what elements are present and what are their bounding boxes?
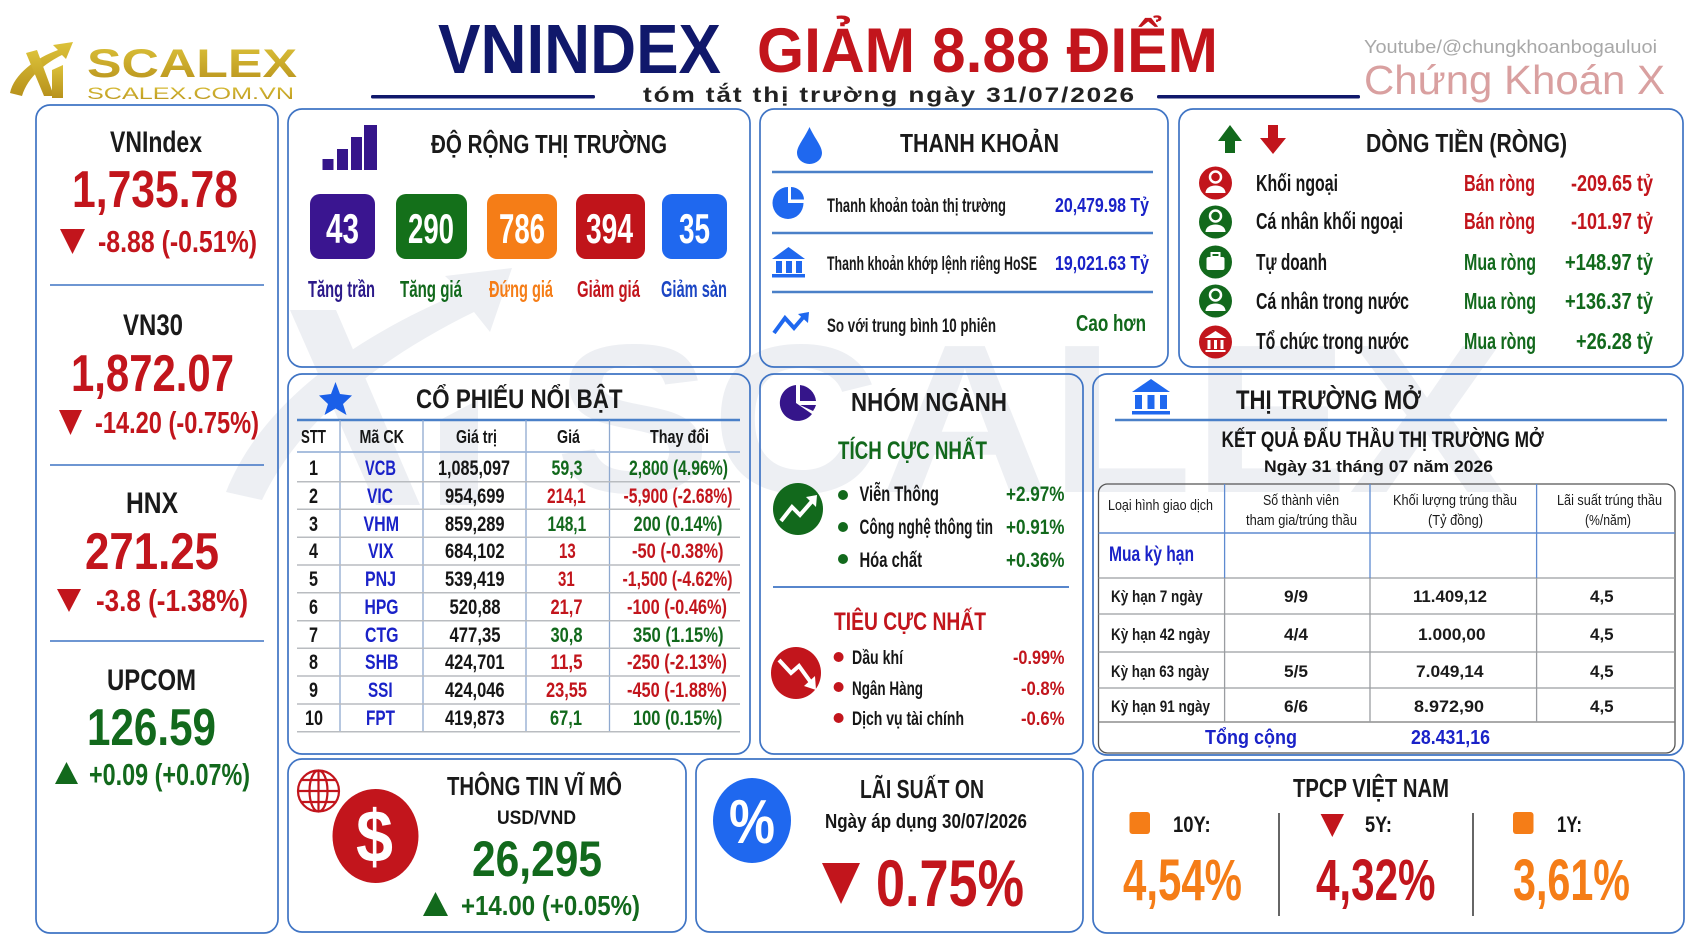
row: foreign [1199, 166, 1653, 200]
row VCB: VCB [365, 457, 396, 480]
bond 10Y: 10Y: [1173, 812, 1211, 837]
stat: up: 290 [408, 205, 454, 252]
panel: liquidity [760, 109, 1168, 367]
title: VNINDEX [438, 10, 721, 88]
list: positive sectors: +0.36% [1006, 549, 1065, 572]
stat: down: 394 [586, 205, 633, 252]
bond 1Y: 1Y: [1557, 812, 1582, 837]
icon: percent: % [729, 788, 775, 857]
VNIndex block: 1,735.78 [72, 161, 238, 219]
row: whole market: 20,479.98 Tỷ [1055, 195, 1150, 217]
list: positive sectors: +0.91% [1006, 516, 1065, 539]
stat: unchanged: 786 [499, 205, 545, 252]
UPCOM block: +0.09 (+0.07%) [89, 757, 250, 792]
row total: Tổng cộng [1205, 727, 1297, 749]
row: domestic individual: Mua ròng [1464, 288, 1536, 314]
row SSI: 424,046 [445, 679, 505, 702]
row FPT [305, 707, 722, 730]
row: HoSE matched: 19,021.63 Tỷ [1055, 253, 1150, 275]
row 63 days: 7.049,14 [1416, 662, 1484, 681]
row VHM [309, 513, 722, 536]
row: whole market [772, 187, 1150, 219]
stat: up: Tăng giá [400, 276, 462, 302]
row: compared with 10 sessions: Cao hơn [1076, 310, 1146, 336]
table header [1108, 493, 1662, 529]
panel: market indices [36, 105, 278, 933]
title: GIẢM 8.88 ĐIỂM [757, 15, 1218, 86]
row 7 days: Kỳ hạn 7 ngày [1111, 587, 1203, 606]
logo: Scalex [10, 42, 297, 103]
row: proprietary: Tự doanh [1256, 249, 1327, 275]
row total [1205, 727, 1490, 749]
row VCB: 2,800 (4.96%) [629, 457, 728, 480]
row PNJ: 5 [309, 568, 318, 591]
HNX block: HNX [126, 487, 178, 520]
row SSI [309, 679, 727, 702]
panel: macro info [288, 759, 686, 932]
VN30 block: -14.20 (-0.75%) [95, 405, 259, 440]
heading: open market: THỊ TRƯỜNG MỞ [1236, 383, 1421, 415]
row 63 days: 5/5 [1284, 662, 1308, 681]
heading: bonds: TPCP VIỆT NAM [1293, 773, 1449, 803]
list: negative sectors: Dịch vụ tài chính [852, 709, 964, 730]
table header: tham gia/trúng thầu [1246, 513, 1357, 529]
row 42 days [1111, 625, 1614, 644]
channel credit: Chứng Khoán X [1364, 57, 1665, 103]
row VHM: 200 (0.14%) [634, 513, 722, 536]
row 91 days: 6/6 [1284, 697, 1308, 716]
table header: Lãi suất trúng thầu [1557, 493, 1662, 509]
panel: notable stocks [288, 374, 750, 754]
row VHM: 148,1 [548, 513, 586, 536]
row VHM: 859,289 [445, 513, 505, 536]
stat: up [396, 194, 467, 302]
table header: Mã CK [360, 427, 404, 447]
row VIX: VIX [368, 540, 394, 563]
row HPG [309, 596, 727, 619]
row 7 days: 9/9 [1284, 587, 1308, 606]
panel: net money flow [1179, 109, 1683, 367]
table header: (%/năm) [1585, 513, 1631, 529]
row VIC: -5,900 (-2.68%) [624, 485, 732, 508]
row: compared with 10 sessions: So với trung bình 10 phiên [827, 316, 996, 337]
list: negative sectors: Ngân Hàng [852, 679, 923, 700]
row: domestic institution: +26.28 tỷ [1576, 328, 1653, 354]
row VIC: 2 [309, 485, 318, 508]
icon: dollar: $ [356, 795, 393, 878]
row SSI: 9 [309, 679, 318, 702]
stat: ceiling [308, 194, 375, 302]
label: currency pair: USD/VND [497, 808, 576, 829]
row VIX: 684,102 [445, 540, 505, 563]
change: exchange rate: +14.00 (+0.05%) [461, 890, 640, 921]
row 63 days: 4,5 [1590, 662, 1614, 681]
row VIX: 13 [559, 540, 576, 563]
VN30 block: 1,872.07 [71, 345, 234, 403]
row HPG: 520,88 [450, 596, 501, 619]
row: HoSE matched: Thanh khoản khớp lệnh riêng HoSE [827, 254, 1037, 275]
heading: macro: THÔNG TIN VĨ MÔ [447, 771, 622, 801]
row: foreign: Khối ngoại [1256, 170, 1338, 196]
channel credit [1364, 37, 1665, 103]
row 7 days: 11.409,12 [1413, 587, 1487, 606]
VNIndex block: -8.88 (-0.51%) [98, 224, 257, 259]
row SHB: -250 (-2.13%) [627, 651, 727, 674]
subheading: auction result: Ngày 31 tháng 07 năm 2026 [1264, 457, 1493, 476]
panel: government bonds [1093, 760, 1684, 933]
title [438, 10, 1218, 88]
panel: market breadth [288, 109, 750, 367]
icon: bank [1132, 379, 1170, 414]
row: whole market: Thanh khoản toàn thị trường [827, 196, 1006, 217]
row 42 days: 1.000,00 [1418, 625, 1486, 644]
icon: down arrow [1260, 125, 1286, 154]
icon: trending down [771, 647, 821, 699]
list: positive sectors: Hóa chất [860, 549, 922, 572]
icon: up arrow [1218, 125, 1242, 153]
heading: ON rate: LÃI SUẤT ON [860, 774, 984, 804]
value: exchange rate: 26,295 [472, 831, 602, 887]
UPCOM block: UPCOM [107, 664, 196, 697]
HNX block: 271.25 [85, 523, 219, 581]
icon: globe [298, 770, 339, 812]
row 42 days: 4/4 [1284, 625, 1309, 644]
row FPT: FPT [366, 707, 395, 730]
panel: open market [1093, 374, 1683, 755]
bond 1Y: 3,61% [1513, 848, 1630, 913]
row HPG: 6 [309, 596, 318, 619]
VN30 block [59, 309, 259, 440]
row SHB: SHB [365, 651, 398, 674]
row SHB: 11,5 [550, 651, 583, 674]
row FPT: 419,873 [445, 707, 505, 730]
heading: most negative: TIÊU CỰC NHẤT [834, 606, 986, 636]
row: foreign: Bán ròng [1464, 170, 1535, 196]
row VIC: 214,1 [547, 485, 586, 508]
logo: Scalex: SCALEX.COM.VN [87, 84, 294, 103]
row VCB: 1 [309, 457, 318, 480]
text: effective date: Ngày áp dụng 30/07/2026 [825, 811, 1027, 833]
row FPT: 100 (0.15%) [633, 707, 722, 730]
logo: Scalex: SCALEX [87, 42, 297, 86]
table: stocks [297, 420, 740, 732]
table header: Thay đổi [650, 427, 709, 447]
row FPT: 67,1 [550, 707, 582, 730]
row SHB: 8 [309, 651, 318, 674]
subtitle: tóm tắt thị trường ngày 31/07/2026 [643, 83, 1136, 107]
row: proprietary [1199, 246, 1653, 278]
list: negative sectors: -0.6% [1021, 709, 1065, 730]
row: foreign individual: Bán ròng [1464, 208, 1535, 234]
row: HoSE matched [772, 247, 1150, 278]
stat: floor: 35 [679, 205, 710, 252]
table header: (Tỷ đồng) [1428, 513, 1483, 529]
row VIC: VIC [367, 485, 393, 508]
list: negative sectors [834, 648, 1065, 730]
row: domestic institution: Tổ chức trong nước [1256, 328, 1409, 354]
list: positive sectors: Viễn Thông [860, 482, 939, 506]
row PNJ: PNJ [365, 568, 396, 591]
subheading: auction result: KẾT QUẢ ĐẤU THẦU THỊ TRƯỜNG MỞ [1222, 427, 1544, 452]
list: negative sectors: -0.99% [1013, 648, 1065, 669]
row CTG: 350 (1.15%) [633, 624, 724, 647]
row: proprietary: +148.97 tỷ [1565, 249, 1653, 275]
background watermark [226, 268, 1505, 537]
value: ON rate: 0.75% [876, 846, 1024, 920]
list: positive sectors [838, 482, 1065, 572]
heading: sectors: NHÓM NGÀNH [851, 387, 1007, 417]
row total: 28.431,16 [1411, 727, 1490, 749]
value: ON rate [822, 846, 1024, 920]
background watermark: SCALEX [555, 300, 1505, 537]
subheading: auction result [1222, 427, 1544, 476]
icon: star [319, 382, 352, 415]
row 42 days: Kỳ hạn 42 ngày [1111, 625, 1210, 644]
UPCOM block: 126.59 [87, 699, 216, 757]
list: positive sectors: Công nghệ thông tin [860, 516, 993, 539]
icon: pie chart [780, 385, 816, 421]
row FPT: 10 [305, 707, 323, 730]
row: domestic institution: Mua ròng [1464, 328, 1536, 354]
row SHB [309, 651, 727, 674]
row HPG: HPG [364, 596, 398, 619]
row 91 days [1111, 697, 1614, 716]
table header [301, 427, 709, 447]
bond 10Y [1123, 812, 1242, 913]
table header: STT [301, 427, 326, 447]
HNX block [57, 487, 248, 618]
row 7 days: 4,5 [1590, 587, 1614, 606]
stat: ceiling: 43 [326, 205, 359, 252]
row 42 days: 4,5 [1590, 625, 1614, 644]
subtitle [371, 83, 1360, 107]
row PNJ: 31 [558, 568, 575, 591]
row 63 days [1111, 662, 1614, 681]
list: positive sectors: +2.97% [1006, 483, 1065, 506]
row CTG: 477,35 [450, 624, 501, 647]
row VIX: 4 [309, 540, 318, 563]
row CTG [309, 624, 724, 647]
row SSI: -450 (-1.88%) [627, 679, 727, 702]
HNX block: -3.8 (-1.38%) [96, 583, 248, 618]
VN30 block: VN30 [123, 309, 183, 342]
panel: sectors [760, 374, 1083, 754]
row VIX [309, 540, 724, 563]
row: compared with 10 sessions [774, 310, 1146, 337]
table: auction [1098, 484, 1675, 753]
heading: breadth: ĐỘ RỘNG THỊ TRƯỜNG [431, 129, 667, 159]
row SSI: 23,55 [546, 679, 587, 702]
heading: stocks: CỔ PHIẾU NỔI BẬT [416, 383, 623, 414]
list: negative sectors: Dầu khí [852, 648, 904, 669]
row CTG: CTG [365, 624, 398, 647]
icon: signal bars [322, 125, 377, 170]
stat: down: Giảm giá [577, 276, 640, 302]
row VCB [309, 457, 728, 480]
row: foreign individual [1199, 206, 1653, 238]
heading: money flow: DÒNG TIỀN (RÒNG) [1366, 128, 1567, 158]
bond 10Y: 4,54% [1123, 848, 1242, 913]
row label: term purchase: Mua kỳ hạn [1109, 543, 1194, 566]
row VIC: 954,699 [445, 485, 505, 508]
stat: ceiling: Tăng trần [308, 276, 375, 302]
bond 5Y: 4,32% [1316, 848, 1436, 913]
row: foreign individual: Cá nhân khối ngoại [1256, 208, 1403, 234]
row HPG: -100 (-0.46%) [627, 596, 727, 619]
icon: dollar [332, 789, 418, 883]
table header: Loại hình giao dịch [1108, 498, 1213, 514]
row SHB: 424,701 [445, 651, 505, 674]
table header: Giá trị [456, 427, 497, 447]
row HPG: 21,7 [550, 596, 582, 619]
table header: Khối lượng trúng thầu [1393, 493, 1517, 509]
stat: unchanged [487, 194, 557, 302]
icon: water drop [797, 127, 822, 164]
row VHM: 3 [309, 513, 318, 536]
icon: trending up [773, 483, 823, 535]
row: domestic individual: Cá nhân trong nước [1256, 288, 1409, 314]
row VHM: VHM [364, 513, 399, 536]
panel: overnight rate [696, 759, 1083, 932]
row: domestic individual [1199, 284, 1653, 318]
row 7 days [1111, 587, 1614, 606]
row 63 days: Kỳ hạn 63 ngày [1111, 662, 1209, 681]
row VCB: 1,085,097 [438, 457, 510, 480]
row SSI: SSI [368, 679, 393, 702]
VNIndex block: VNIndex [110, 126, 202, 159]
bond 5Y [1316, 812, 1436, 913]
row 91 days: Kỳ hạn 91 ngày [1111, 697, 1210, 716]
row: proprietary: Mua ròng [1464, 249, 1536, 275]
row 91 days: 8.972,90 [1414, 697, 1484, 716]
row VCB: 59,3 [552, 457, 582, 480]
row: foreign individual: -101.97 tỷ [1571, 208, 1653, 234]
table header: Số thành viên [1263, 493, 1339, 509]
UPCOM block [55, 664, 250, 792]
heading: most positive: TÍCH CỰC NHẤT [838, 436, 987, 465]
row CTG: 7 [309, 624, 318, 647]
row VIX: -50 (-0.38%) [632, 540, 724, 563]
bond 1Y [1513, 812, 1630, 913]
row PNJ: -1,500 (-4.62%) [622, 568, 732, 591]
row 91 days: 4,5 [1590, 697, 1614, 716]
stat: down [576, 194, 645, 302]
VNIndex block [60, 126, 257, 259]
channel credit: Youtube/@chungkhoanbogauluoi [1364, 37, 1657, 57]
row PNJ [309, 568, 732, 591]
row: foreign: -209.65 tỷ [1571, 170, 1653, 196]
heading: liquidity: THANH KHOẢN [900, 128, 1059, 158]
row VIC [309, 485, 732, 508]
stat: unchanged: Đứng giá [489, 276, 553, 302]
row: domestic individual: +136.37 tỷ [1565, 288, 1653, 314]
row: domestic institution [1199, 326, 1653, 358]
stat: floor [661, 194, 727, 302]
stat: floor: Giảm sàn [661, 276, 727, 302]
icon: percent [713, 778, 791, 863]
row PNJ: 539,419 [445, 568, 505, 591]
bond 5Y: 5Y: [1365, 812, 1392, 837]
list: negative sectors: -0.8% [1021, 679, 1065, 700]
table header: Giá [557, 427, 581, 447]
row CTG: 30,8 [550, 624, 583, 647]
